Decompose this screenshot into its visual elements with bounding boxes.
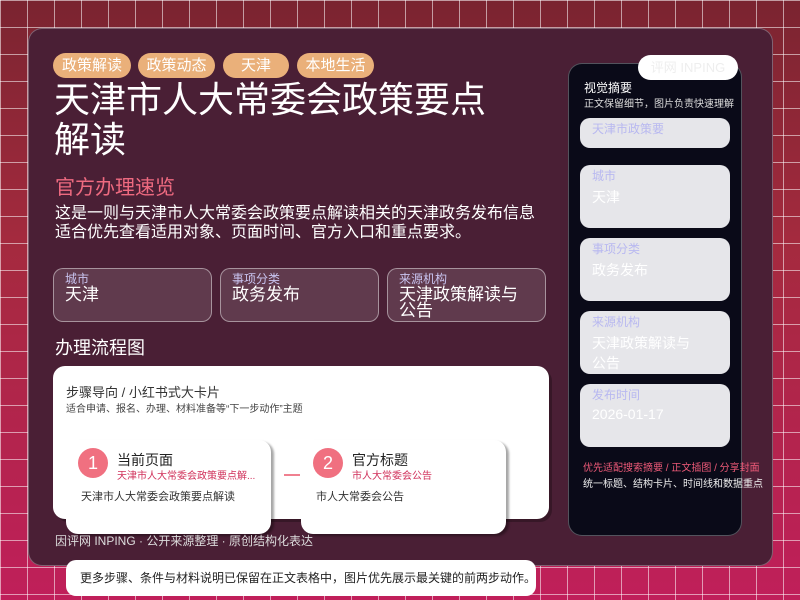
text: 事项分类 (592, 242, 640, 256)
text: 天津政策解读与 (592, 335, 690, 351)
step 2: 市人大常委会公告 (352, 471, 432, 482)
step 1 (66, 440, 271, 534)
card: category: 事项分类 (232, 272, 280, 286)
card: source (387, 268, 546, 322)
card: city (53, 268, 212, 322)
step 2: 市人大常委会公告 (316, 491, 404, 503)
side panel: 优先适配搜索摘要 / 正文插图 / 分享封面 (583, 463, 760, 474)
bottom note (66, 560, 536, 596)
title (54, 79, 486, 160)
card: category (220, 268, 379, 322)
step 1: 天津市人大常委会政策要点解... (117, 471, 255, 482)
side badge (638, 55, 738, 80)
description: 这是一则与天津市人大常委会政策要点解读相关的天津政务发布信息 (55, 205, 535, 222)
text: 发布时间 (592, 388, 640, 402)
arrow (284, 474, 300, 476)
tags: 政策动态 (146, 57, 206, 74)
title: 天津市人大常委会政策要点 (54, 79, 486, 120)
text: 政务发布 (592, 262, 648, 278)
side badge: 评网 INPING (651, 60, 725, 75)
step 1: 1 (88, 453, 98, 473)
side panel: 正文保留细节，图片负责快速理解 (584, 99, 734, 110)
tags: 政策解读 (62, 57, 122, 74)
flow panel: 步骤导向 / 小红书式大卡片 (66, 385, 220, 400)
tags: 天津 (241, 57, 271, 74)
subtitle: 官方办理速览 (55, 177, 175, 199)
description (55, 204, 535, 241)
card: city: 城市 (65, 272, 89, 286)
flow panel (53, 366, 549, 519)
tags (53, 53, 374, 78)
text: 天津 (592, 189, 620, 205)
text: 公告 (592, 355, 620, 371)
step 2: 2 (323, 453, 333, 473)
bottom note: 更多步骤、条件与材料说明已保留在正文表格中，图片优先展示最关键的前两步动作。 (80, 571, 536, 585)
card: source: 来源机构 (399, 272, 447, 286)
flow heading: 办理流程图 (55, 338, 145, 358)
info cards (53, 268, 546, 322)
side panel: 统一标题、结构卡片、时间线和数据重点 (583, 479, 763, 490)
title: 解读 (54, 119, 126, 160)
flow panel: 适合申请、报名、办理、材料准备等“下一步动作”主题 (66, 404, 303, 415)
side cards: 天津市政策要 (592, 122, 664, 136)
step 2 (301, 440, 506, 534)
step 1: 当前页面 (117, 452, 173, 468)
step 2: 官方标题 (352, 452, 408, 468)
side cards (580, 118, 730, 148)
card: category: 政务发布 (232, 285, 300, 304)
text: 2026-01-17 (592, 406, 664, 422)
card: source: 公告 (399, 301, 433, 320)
tags: 本地生活 (305, 57, 366, 74)
card: city: 天津 (65, 285, 99, 304)
card: source: 天津政策解读与 (399, 285, 518, 304)
side panel: 视觉摘要 (584, 81, 632, 95)
description: 适合优先查看适用对象、页面时间、官方入口和重点要求。 (55, 224, 471, 241)
side panel (568, 63, 742, 536)
text: 来源机构 (592, 315, 640, 329)
footer credit: 因评网 INPING · 公开来源整理 · 原创结构化表达 (55, 534, 313, 548)
text: 城市 (592, 169, 616, 183)
step 1: 天津市人大常委会政策要点解读 (81, 491, 235, 503)
